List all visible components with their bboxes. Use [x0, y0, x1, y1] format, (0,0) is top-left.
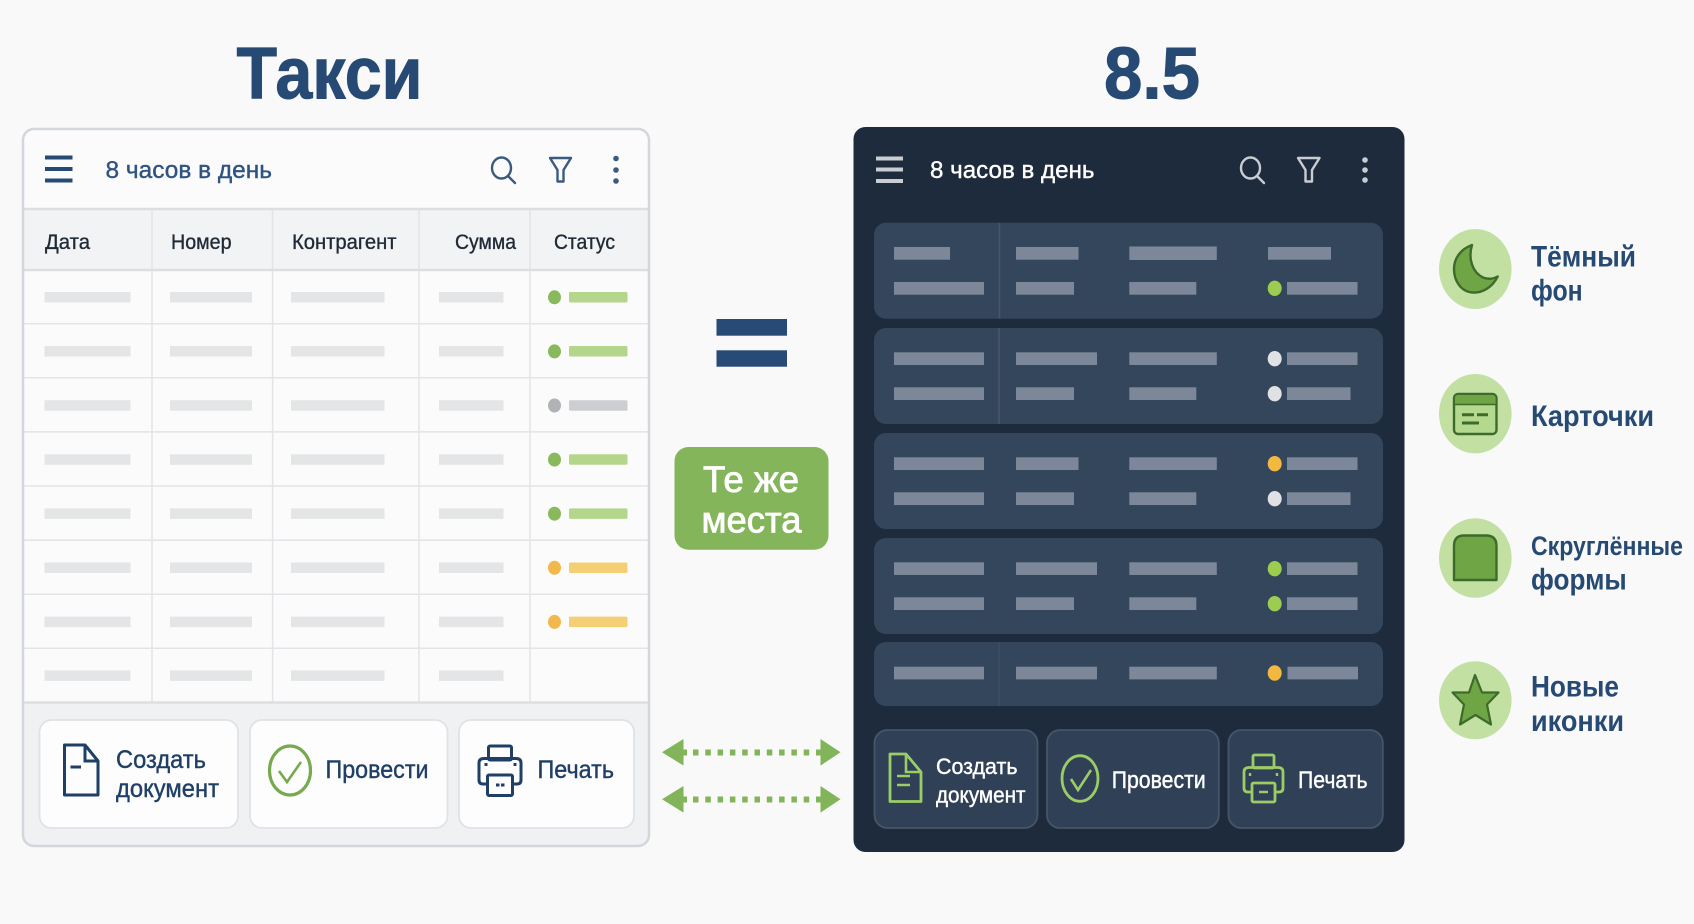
card 5 [874, 642, 1383, 706]
icon: more [613, 156, 619, 184]
arrow: top double-headed [662, 739, 840, 766]
icon: filter [550, 158, 571, 182]
badge: Те же места: Те же [703, 459, 799, 500]
feature: Карточки [1439, 374, 1654, 453]
icon: search [1241, 158, 1264, 183]
row 4 [44, 453, 628, 467]
button: Провести: Провести [1112, 767, 1206, 794]
button: Создать документ [40, 720, 238, 828]
table header: Номер [171, 230, 232, 254]
row 5 [44, 507, 628, 521]
equals sign [716, 319, 787, 367]
button: Создать документ: документ [116, 775, 220, 803]
row 7 [44, 615, 628, 629]
feature: Карточки: Карточки [1531, 400, 1654, 433]
row 8 [44, 670, 504, 681]
arrow: bottom double-headed [662, 786, 840, 813]
feature: Скруглённые формы [1439, 518, 1683, 598]
card 2 [874, 328, 1383, 424]
button: Печать: Печать [538, 756, 614, 784]
toolbar title: 8 часов в день [106, 157, 272, 184]
table header: Сумма [455, 230, 516, 254]
row 2 [44, 344, 628, 358]
table header [45, 230, 615, 254]
badge: Те же места [674, 447, 828, 550]
icon: menu [45, 156, 72, 182]
row 1 [44, 290, 628, 304]
row 3 [44, 398, 628, 412]
button: Создать документ: документ [936, 782, 1026, 808]
title: Такси: Такси [236, 34, 422, 114]
button: Печать: Печать [1298, 767, 1368, 794]
table header: Статус [554, 230, 615, 254]
icon: search [492, 158, 515, 183]
button: Провести [250, 720, 448, 828]
feature: Тёмный фон: Тёмный [1531, 241, 1636, 274]
feature: Новые иконки: Новые [1531, 671, 1619, 704]
button: Печать [1228, 730, 1383, 828]
panel: dark card interface [854, 127, 1404, 852]
button: Создать документ: Создать [116, 746, 206, 774]
card 4 [874, 538, 1383, 634]
card 3 [874, 433, 1383, 529]
feature: Скруглённые формы: формы [1531, 563, 1627, 596]
button: Провести: Провести [326, 756, 428, 784]
toolbar title: 8 часов в день [930, 157, 1094, 184]
title: 8.5: 8.5 [1104, 34, 1200, 114]
button: Печать [459, 720, 634, 828]
table header: Контрагент [292, 230, 397, 254]
badge: Те же места: места [702, 499, 802, 540]
button: Создать документ [874, 730, 1038, 828]
table header: Дата [45, 230, 90, 254]
row 6 [44, 561, 628, 575]
icon: filter [1298, 158, 1320, 182]
panel: light table interface [22, 128, 650, 847]
card 1 [874, 223, 1383, 319]
icon: more [1362, 157, 1368, 183]
feature: Тёмный фон [1439, 229, 1636, 309]
feature: Новые иконки [1439, 661, 1624, 739]
button: Провести [1047, 730, 1219, 828]
button: Создать документ: Создать [936, 754, 1018, 779]
icon: menu [876, 156, 903, 183]
feature: Новые иконки: иконки [1531, 705, 1624, 738]
feature: Тёмный фон: фон [1531, 275, 1583, 308]
